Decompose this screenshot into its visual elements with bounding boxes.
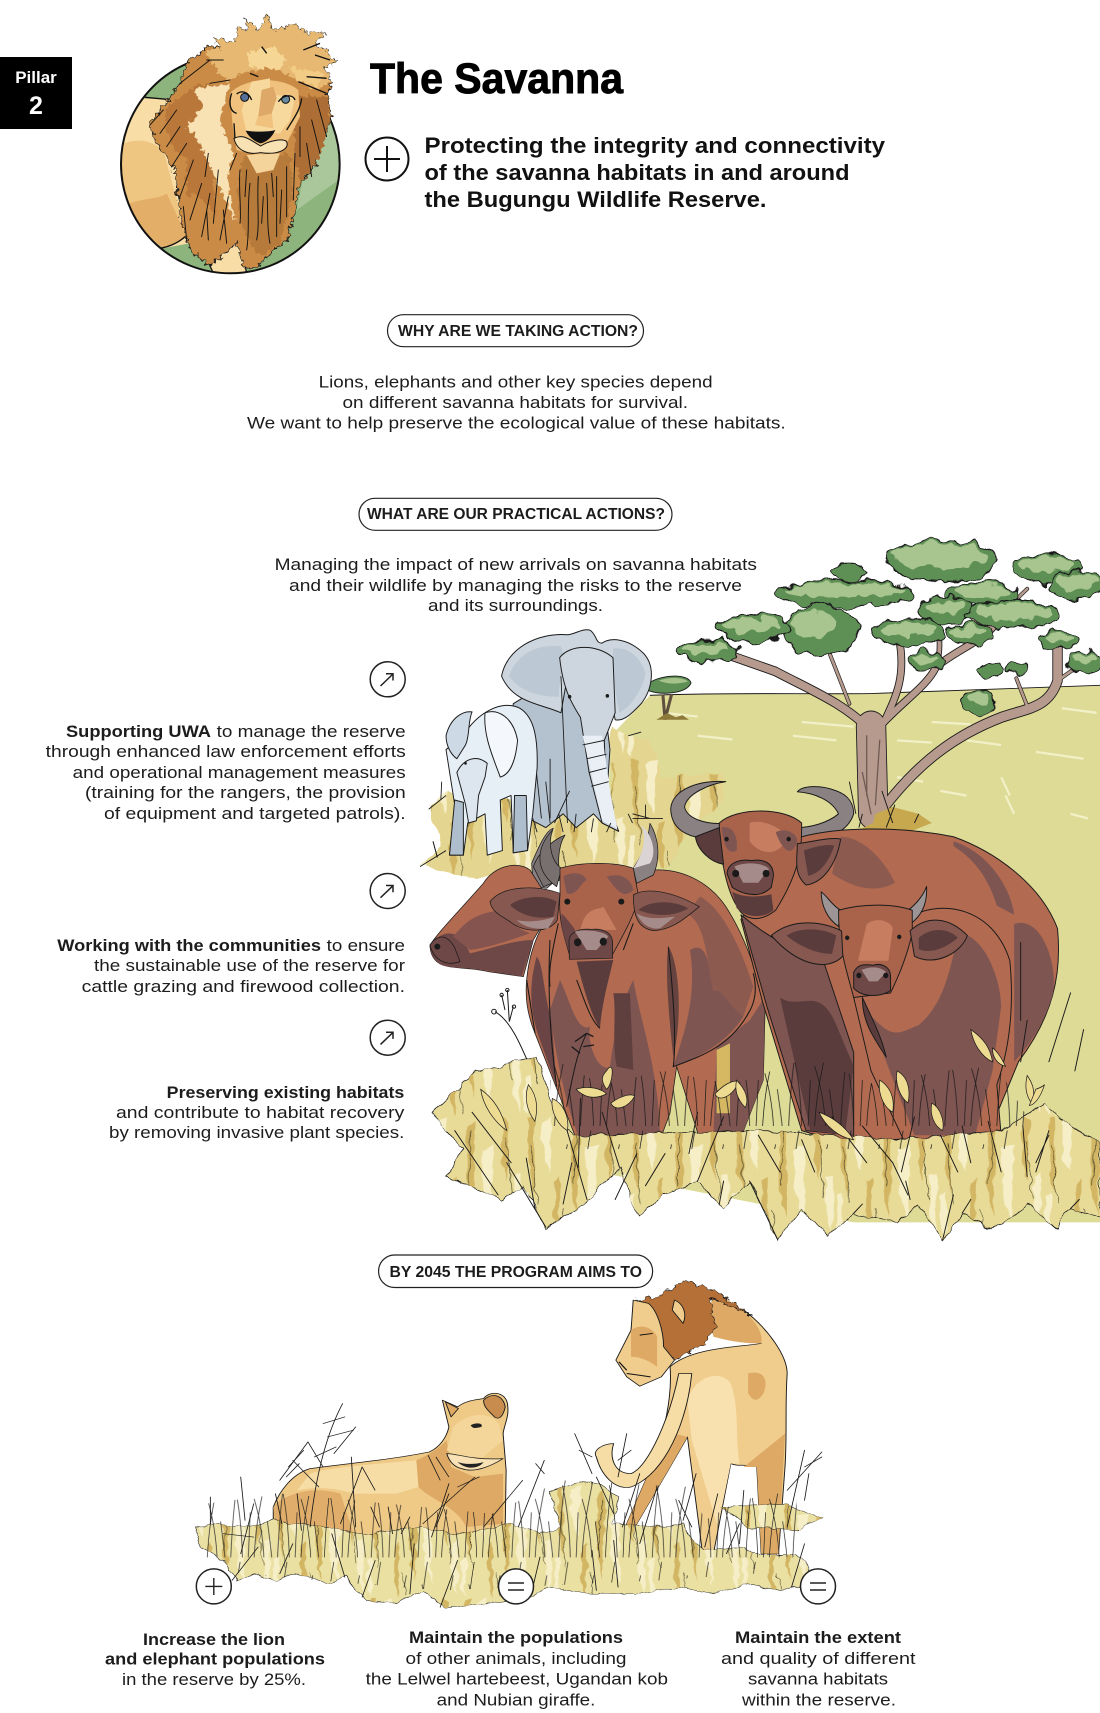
calf buffalo: [771, 886, 1011, 1144]
text: preserving habitats: [109, 1084, 405, 1142]
goal text: increase lion and elephant: [105, 1631, 325, 1689]
right buffaloes and foreground grass: [433, 781, 1100, 1240]
heading pill: why: WHY ARE WE TAKING ACTION?: [398, 323, 638, 340]
mane: [150, 13, 336, 270]
goal text: maintain populations: the Lelwel hartebeest, Ugandan kob: [366, 1671, 668, 1689]
pillar badge: 2: [29, 92, 43, 120]
text: preserving habitats: Preserving existing habitats: [167, 1084, 404, 1102]
text: managing impact: and their wildlife by managing the risks to the reserve: [289, 577, 742, 595]
text: preserving habitats: and contribute to habitat recovery: [116, 1104, 405, 1122]
text: working with communities: [57, 937, 406, 996]
text: managing impact: and its surroundings.: [428, 597, 603, 615]
goal text: maintain populations: and Nubian giraffe.: [437, 1692, 595, 1710]
text: supporting UWA: (training for the rangers, the provision: [85, 784, 406, 802]
background: ground, trees, elephants: [420, 540, 1100, 1222]
icon: plus goal: [196, 1569, 231, 1604]
heading pill: by 2045: [379, 1255, 653, 1288]
text: supporting UWA: Supporting UWA: [66, 723, 211, 741]
goal text: maintain extent: and quality of different: [721, 1650, 916, 1668]
front head: [490, 823, 699, 959]
face: [230, 80, 300, 155]
goal text: maintain extent: within the reserve.: [741, 1692, 896, 1710]
savanna scene illustration: [420, 540, 1100, 1240]
icon: lion portrait in circle: [117, 13, 343, 273]
subtitle: the Bugungu Wildlife Reserve.: [424, 187, 766, 212]
rear buffalo head: [430, 828, 565, 977]
foreground golden grass: [433, 942, 1100, 1240]
goal text: maintain extent: [721, 1629, 916, 1710]
goal text: maintain extent: Maintain the extent: [735, 1629, 902, 1647]
icon: arrow 2: [370, 874, 405, 908]
male lion: [595, 1280, 787, 1554]
mane strands: [150, 60, 327, 250]
heading pill: why: [388, 315, 644, 347]
acacia tree: [724, 589, 1084, 814]
goal text: maintain extent: savanna habitats: [748, 1671, 888, 1689]
icon: arrow 3: [370, 1020, 405, 1055]
lioness: [273, 1393, 508, 1540]
heading pill: practical actions: WHAT ARE OUR PRACTICAL ACTIONS?: [367, 506, 665, 523]
grass blades: [206, 1404, 822, 1607]
heading pill: practical actions: [359, 498, 672, 530]
icon: arrow 1: [370, 662, 405, 697]
pillar badge: [0, 57, 72, 129]
text: working with communities: cattle grazing and firewood collection.: [82, 978, 405, 996]
grass patch lion base: [195, 1480, 822, 1607]
goal text: increase lion and elephant: Increase the lion: [143, 1631, 285, 1649]
front body: [526, 870, 765, 1140]
text: why we act: Lions, elephants and other key species depend: [319, 373, 713, 391]
text: working with communities: Working with the communities: [57, 937, 321, 955]
text: supporting UWA: through enhanced law enforcement efforts: [46, 743, 406, 761]
subtitle: [424, 133, 886, 212]
goal text: increase lion and elephant: and elephant populations: [105, 1650, 325, 1668]
golden grass behind elephants: [420, 727, 724, 878]
text: why we act: We want to help preserve the ecological value of these habitats.: [247, 414, 786, 432]
text: supporting UWA: of equipment and targeted patrols).: [104, 805, 406, 823]
text: working with communities: to ensure: [327, 937, 405, 955]
icon: plus circle: [366, 138, 408, 180]
text: why we act: on different savanna habitats for survival.: [342, 394, 688, 412]
text: supporting UWA: and operational management measures: [73, 764, 406, 782]
text: why we act: [247, 373, 786, 432]
text: supporting UWA: to manage the reserve: [217, 723, 406, 741]
text: working with communities: the sustainable use of the reserve for: [94, 957, 406, 975]
tree canopy: [676, 540, 1100, 716]
text: managing impact: [275, 556, 757, 615]
text: preserving habitats: by removing invasive plant species.: [109, 1124, 404, 1142]
subtitle: of the savanna habitats in and around: [424, 160, 850, 185]
goal text: maintain populations: Maintain the populations: [409, 1629, 623, 1647]
text: managing impact: Managing the impact of new arrivals on savanna habitats: [275, 556, 757, 574]
big elephant: [502, 630, 651, 831]
title: The Savanna: [370, 55, 624, 103]
text: supporting UWA: [46, 723, 406, 823]
subtitle: Protecting the integrity and connectivity: [424, 133, 886, 158]
pillar badge: Pillar: [15, 68, 57, 87]
bottom lions illustration: [195, 1280, 822, 1607]
goal text: maintain populations: [366, 1629, 668, 1710]
leaves: [481, 1030, 1045, 1140]
goal text: maintain populations: of other animals, including: [406, 1650, 626, 1668]
right big buffalo: [671, 781, 1059, 1140]
icon: equals goal 1: [498, 1569, 534, 1604]
small elephant: [446, 705, 537, 855]
flowering stalk: [492, 988, 594, 1107]
small tree left: [649, 676, 691, 720]
icon: equals goal 2: [800, 1569, 836, 1604]
left buffalo pair: [430, 823, 765, 1140]
ground: [550, 685, 1100, 1222]
goal text: increase lion and elephant: in the reserve by 25%.: [122, 1671, 306, 1689]
heading pill: by 2045: BY 2045 THE PROGRAM AIMS TO: [390, 1264, 642, 1281]
